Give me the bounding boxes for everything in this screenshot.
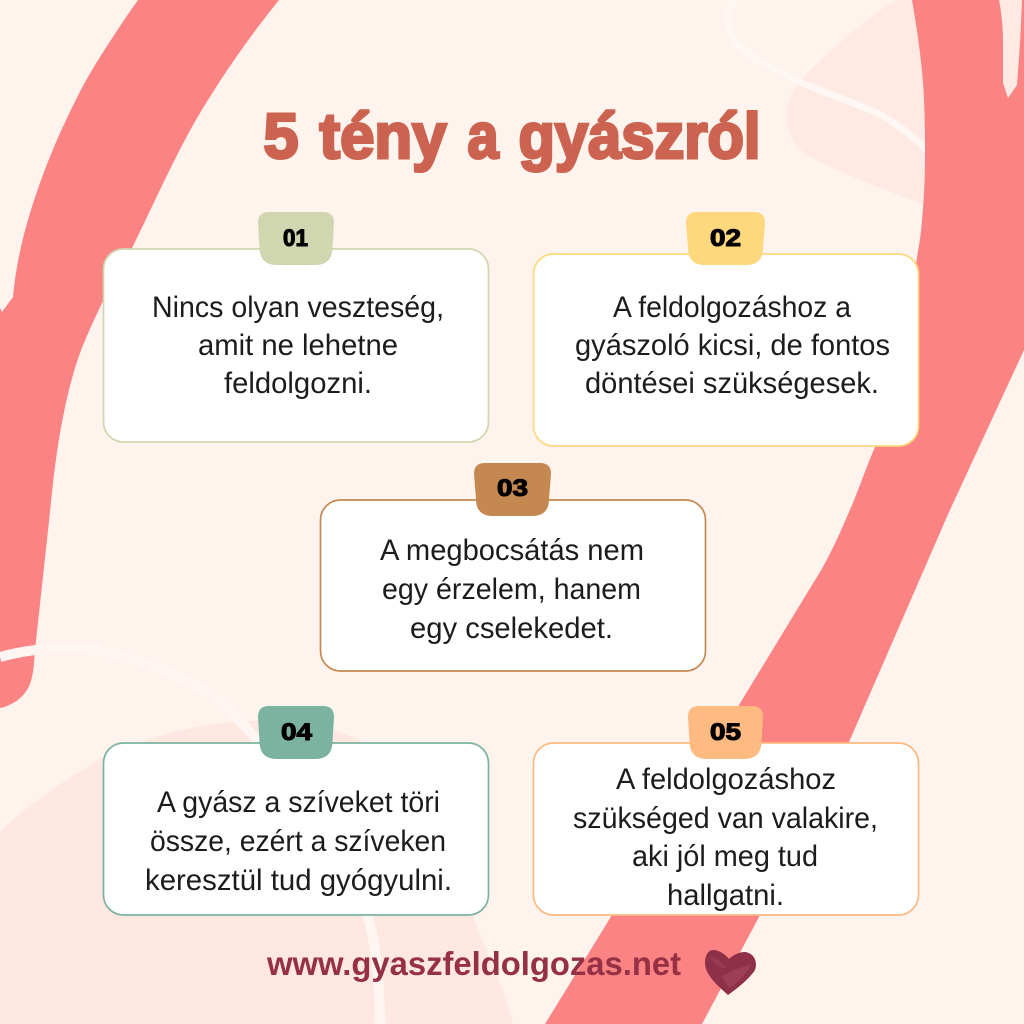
coral band: right (545, 0, 1024, 1024)
badge 01 (258, 212, 334, 265)
background line: bottom left (0, 648, 380, 1024)
card 04 (104, 706, 488, 915)
number 02: 02 (710, 225, 741, 252)
number 04: 04 (281, 719, 313, 746)
card 02 (534, 212, 918, 446)
card 03 text (380, 534, 644, 645)
website url: www.gyaszfeldolgozas.net (266, 945, 681, 982)
number 01: 01 (283, 225, 308, 252)
card 05 text: hallgatni. (667, 879, 784, 912)
card 04 text: keresztül tud gyógyulni. (145, 864, 452, 897)
card 02 text (575, 291, 890, 400)
card 03 text: egy érzelem, hanem (382, 573, 641, 606)
coral band: left (0, 0, 279, 708)
number 05: 05 (710, 719, 741, 746)
background sliver: top right (999, 0, 1022, 98)
card 05 text: aki jól meg tud (632, 840, 818, 873)
badge 05 (688, 706, 763, 759)
card 01 text: amit ne lehetne (198, 329, 398, 362)
card 04 text: A gyász a szíveket töri (157, 786, 440, 819)
card 03 text: egy cselekedet. (410, 612, 613, 645)
card 05 text: A feldolgozáshoz (616, 763, 836, 796)
background blob: top right (786, 0, 930, 207)
card 01 text: feldolgozni. (224, 367, 372, 400)
title: 5 (264, 100, 298, 172)
card 04 text (145, 786, 452, 897)
badge 02 (686, 212, 765, 265)
card 01 text: Nincs olyan veszteség, (152, 291, 444, 324)
card 01 text (152, 291, 444, 400)
title: gyászról (518, 100, 760, 172)
badge 03 (474, 463, 551, 516)
number 03: 03 (497, 475, 528, 502)
card 03 text: A megbocsátás nem (380, 534, 644, 567)
card 03 (320, 463, 706, 671)
background blob: bottom (0, 721, 513, 1024)
badge 04 (258, 706, 334, 759)
icon: heart (705, 950, 756, 995)
background line: top right (728, 0, 927, 150)
card 02 text: A feldolgozáshoz a (613, 291, 852, 324)
card 05 text (573, 763, 878, 912)
card 02 text: döntései szükségesek. (585, 367, 879, 400)
card 05 text: szükséged van valakire, (573, 802, 878, 835)
card 05 (534, 706, 918, 915)
card 04 text: össze, ezért a szíveken (150, 825, 446, 858)
card 01 (104, 212, 488, 442)
title (264, 100, 760, 172)
card 02 text: gyászoló kicsi, de fontos (575, 329, 890, 362)
title: a (468, 100, 499, 172)
title: tény (320, 100, 447, 172)
